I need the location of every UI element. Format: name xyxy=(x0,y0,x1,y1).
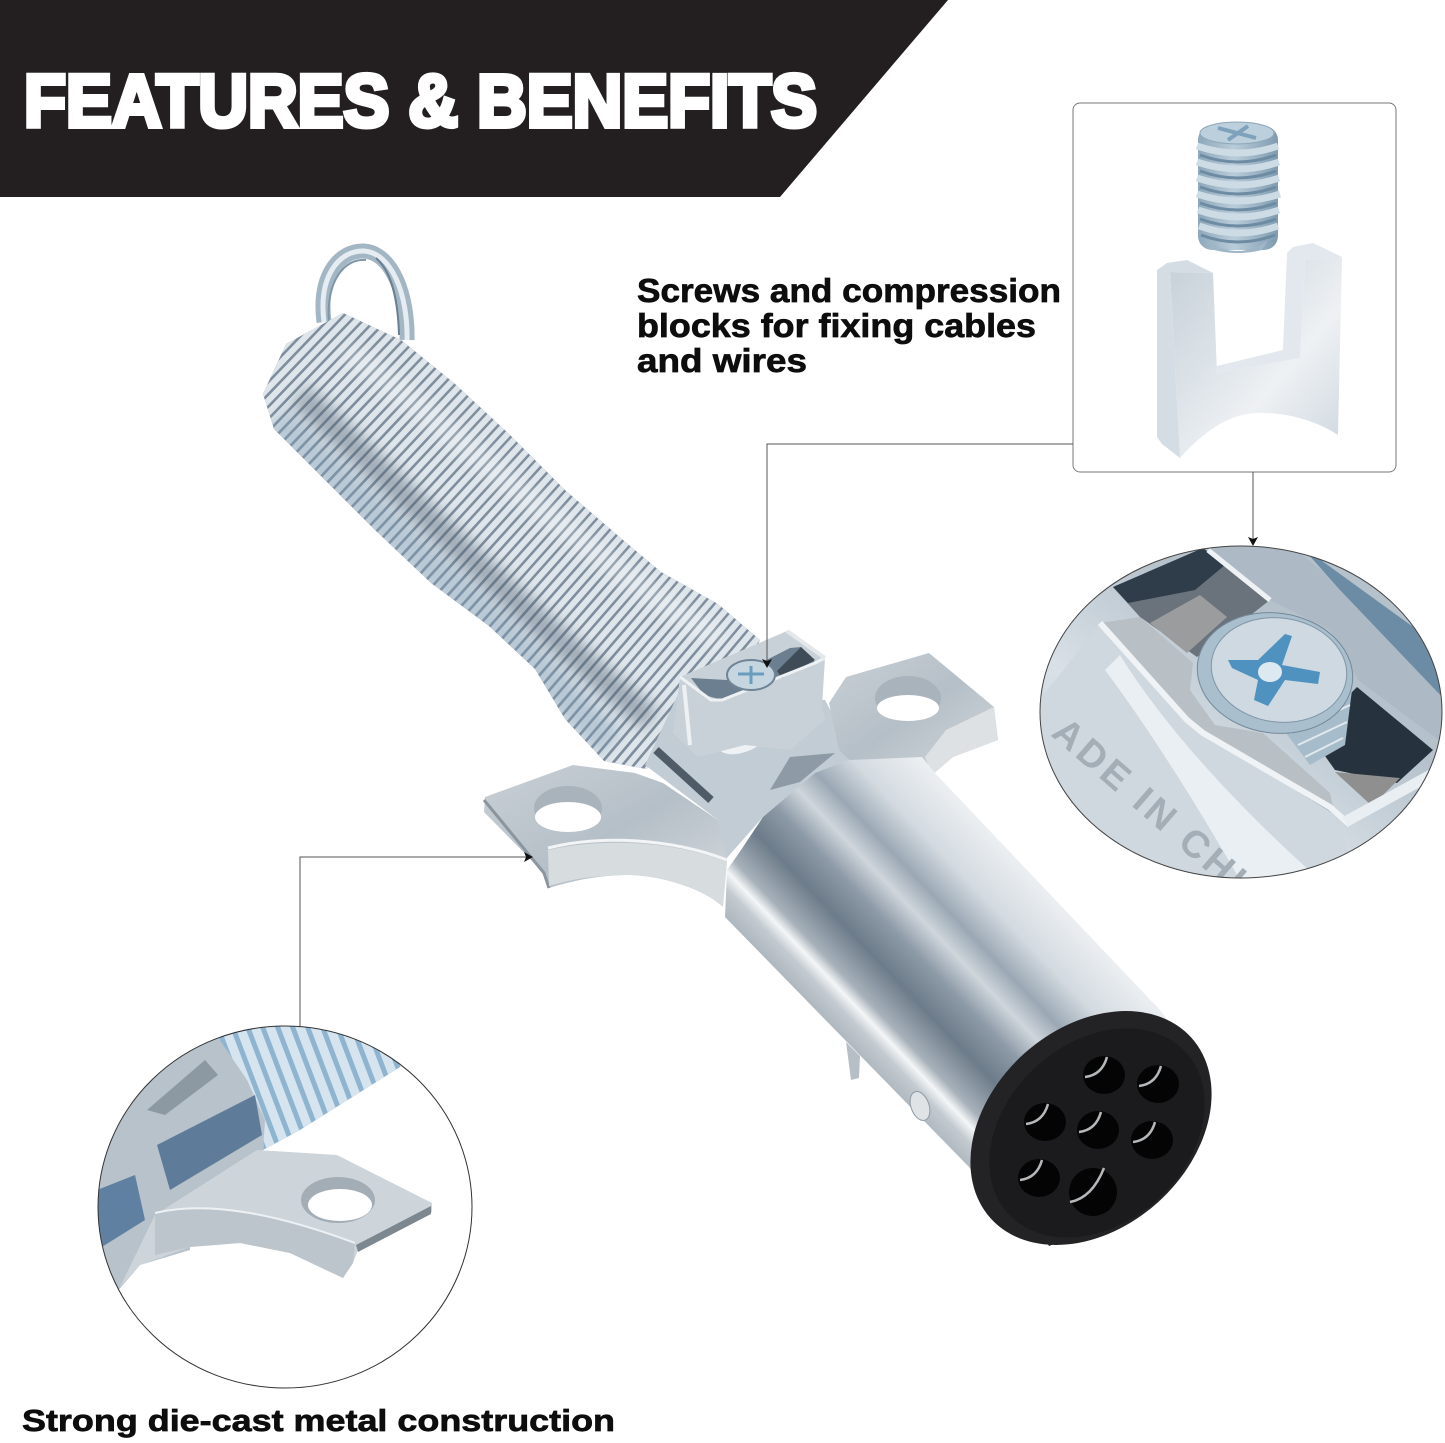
ridge upper right xyxy=(1354,672,1390,704)
spring close-up xyxy=(218,1026,401,1150)
screw block xyxy=(673,631,825,757)
coil spring xyxy=(250,300,770,780)
lower-left metal surface xyxy=(1056,668,1325,868)
title: FEATURES & BENEFITS xyxy=(24,60,817,142)
lower-right slot xyxy=(1325,687,1433,783)
mounting ear: right xyxy=(829,653,998,775)
upper-left slot xyxy=(1113,548,1270,657)
leader line xyxy=(300,857,532,1027)
caption text xyxy=(637,272,1061,379)
connector hub and neck xyxy=(645,690,849,860)
weld ridges xyxy=(1100,623,1350,825)
caption text: Strong die-cast metal construction xyxy=(22,1403,615,1438)
tonal shading xyxy=(300,395,650,720)
rivet xyxy=(906,1089,934,1123)
screw xyxy=(1197,122,1280,253)
detail circle: screw close-up xyxy=(1040,546,1442,878)
set screw xyxy=(727,660,775,690)
caption text: Screws and compression xyxy=(637,272,1061,309)
ear close-up xyxy=(120,1150,432,1287)
caption text: blocks for fixing cables xyxy=(637,307,1036,344)
screw threads xyxy=(1280,690,1352,765)
socket pins xyxy=(1020,1057,1161,1202)
detail circle: mounting ear close-up xyxy=(97,1020,472,1388)
phillips cross xyxy=(1228,634,1320,706)
callout: die-cast metal construction xyxy=(22,857,615,1438)
socket holes xyxy=(1018,1056,1179,1216)
compression block xyxy=(1157,243,1342,458)
tab under body xyxy=(846,1042,860,1080)
leader lines xyxy=(767,444,1253,667)
caption text: and wires xyxy=(637,342,807,379)
ridge band xyxy=(1100,617,1335,815)
block side xyxy=(1157,260,1213,458)
body close-up xyxy=(97,1030,265,1300)
metal cylinder body xyxy=(725,757,1190,1210)
black end cap xyxy=(924,963,1258,1293)
block front face xyxy=(1170,257,1342,458)
screw head xyxy=(1196,612,1354,734)
product photo: trailer connector plug xyxy=(250,251,1258,1293)
callout: screws and compression blocks xyxy=(637,103,1445,944)
embossed text: ADE IN CHINA xyxy=(1044,710,1304,944)
detail panel: screw and block xyxy=(1073,103,1396,472)
block inner wall xyxy=(1213,243,1342,373)
mounting ear: left xyxy=(484,765,727,907)
spring ring xyxy=(323,251,407,340)
title banner xyxy=(0,0,948,197)
